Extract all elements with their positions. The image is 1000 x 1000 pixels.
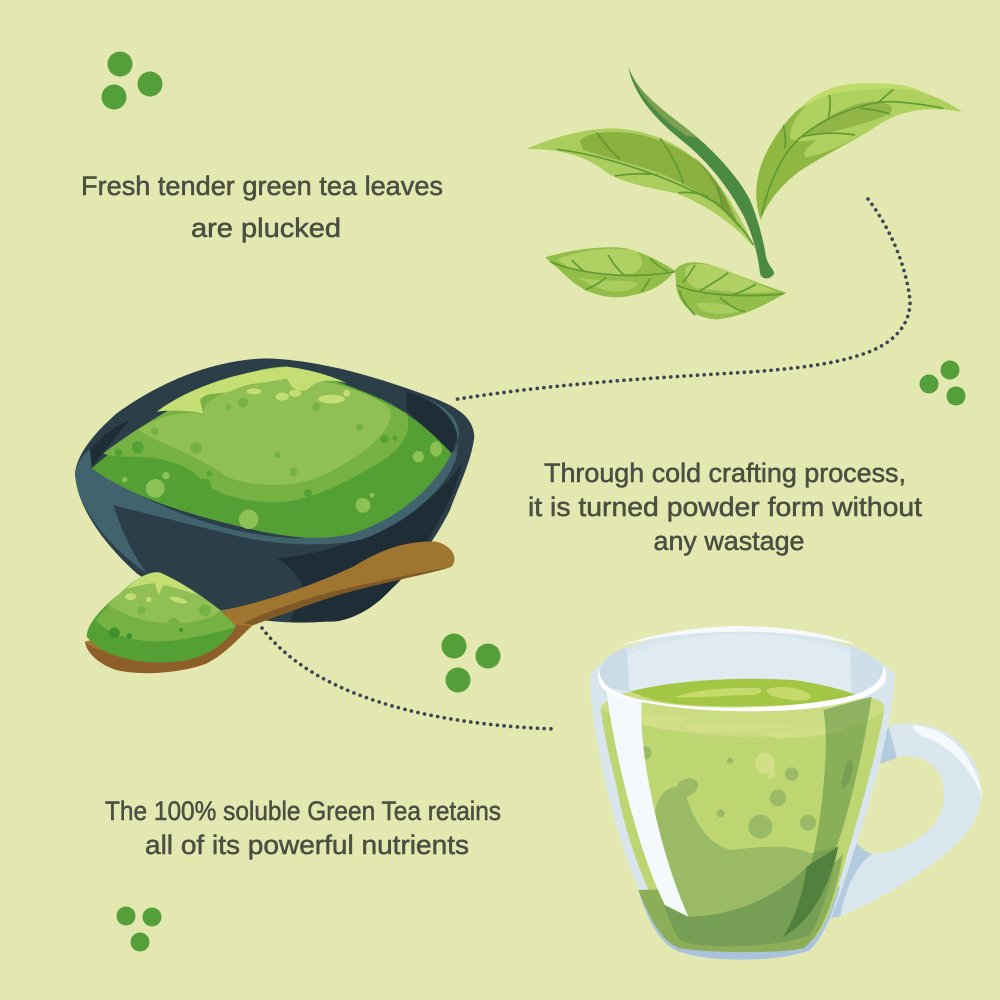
text: step two: it is turned powder form without — [528, 492, 923, 522]
text: step three: all of its powerful nutrients — [145, 830, 469, 860]
icon: glass cup of green tea — [590, 626, 982, 960]
dotted connector: spoon to cup — [262, 628, 557, 729]
text: step one: Fresh tender green tea leaves — [81, 171, 443, 201]
icon: tea leaves — [527, 67, 962, 319]
text: step two — [528, 458, 923, 556]
text: step one — [81, 171, 443, 243]
dotted connector: leaves to bowl — [452, 199, 910, 400]
text: step one: are plucked — [191, 213, 341, 243]
text: step two: any wastage — [654, 526, 804, 556]
dots cluster right — [920, 360, 966, 406]
dots cluster top left — [102, 52, 162, 110]
text: step two: Through cold crafting process, — [544, 458, 906, 488]
dots cluster centre — [442, 634, 500, 692]
icon: matcha bowl with spoon — [75, 358, 474, 673]
dots cluster bottom left — [116, 906, 162, 952]
text: step three — [105, 796, 501, 860]
text: step three: The 100% soluble Green Tea retains — [105, 796, 501, 826]
